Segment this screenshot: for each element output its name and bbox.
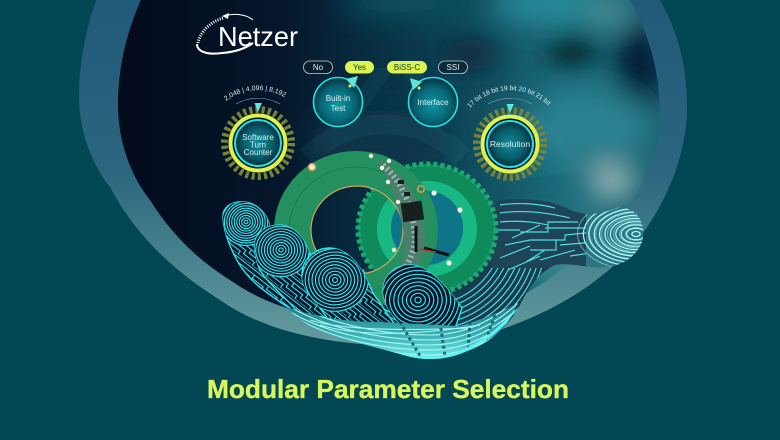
title: Modular Parameter Selection [207, 374, 569, 404]
green PCB stator ring [274, 151, 449, 309]
finger 2 [254, 224, 326, 317]
logo: Netzer [197, 13, 298, 54]
pill: SSI: SSI [447, 63, 459, 72]
button: built-in test: Built-in [326, 94, 350, 103]
hand lower palm glow [286, 298, 518, 359]
dial: resolution: 17 bit 18 bit 19 bit 20 bit 21 bit [468, 85, 550, 108]
pill: SSI [438, 61, 468, 74]
dial: software turn counter: 2,048 | 4,096 | 8,192 [224, 85, 286, 101]
finger 1 [222, 201, 294, 310]
pill: BiSS-C: BiSS-C [394, 63, 420, 72]
button: built-in test: Test [331, 104, 346, 113]
faint rays and arc behind the dials [300, 68, 460, 163]
porthole outer rim [79, 0, 687, 346]
pill: Yes: Yes [353, 63, 366, 72]
finger 3 [301, 247, 394, 323]
dial: resolution: Resolution [490, 139, 530, 149]
porthole interior with blurred backdrop [118, 0, 660, 308]
dial: software turn counter: Software [242, 133, 274, 142]
pill: No: No [313, 63, 324, 72]
finger 4 [382, 264, 463, 326]
button: interface [408, 78, 458, 126]
component strip on PCB [376, 158, 449, 282]
pill: Yes [345, 61, 374, 74]
pill: No [304, 61, 332, 74]
mounting holes [308, 154, 424, 252]
dial: software turn counter [221, 85, 295, 180]
hand palm and thumb [362, 199, 644, 330]
dial: software turn counter: Turn [250, 140, 266, 150]
button: interface: Interface [417, 98, 449, 107]
dial: software turn counter: Counter [244, 148, 273, 157]
pill: BiSS-C [387, 61, 427, 74]
dial: resolution [468, 85, 550, 181]
hand fingers with fingerprint lines [222, 201, 463, 326]
geared encoder rotor ring [358, 164, 496, 294]
logo: Netzer: Netzer [218, 21, 298, 52]
button: built-in test [314, 76, 362, 126]
infographic scene [79, 0, 687, 398]
